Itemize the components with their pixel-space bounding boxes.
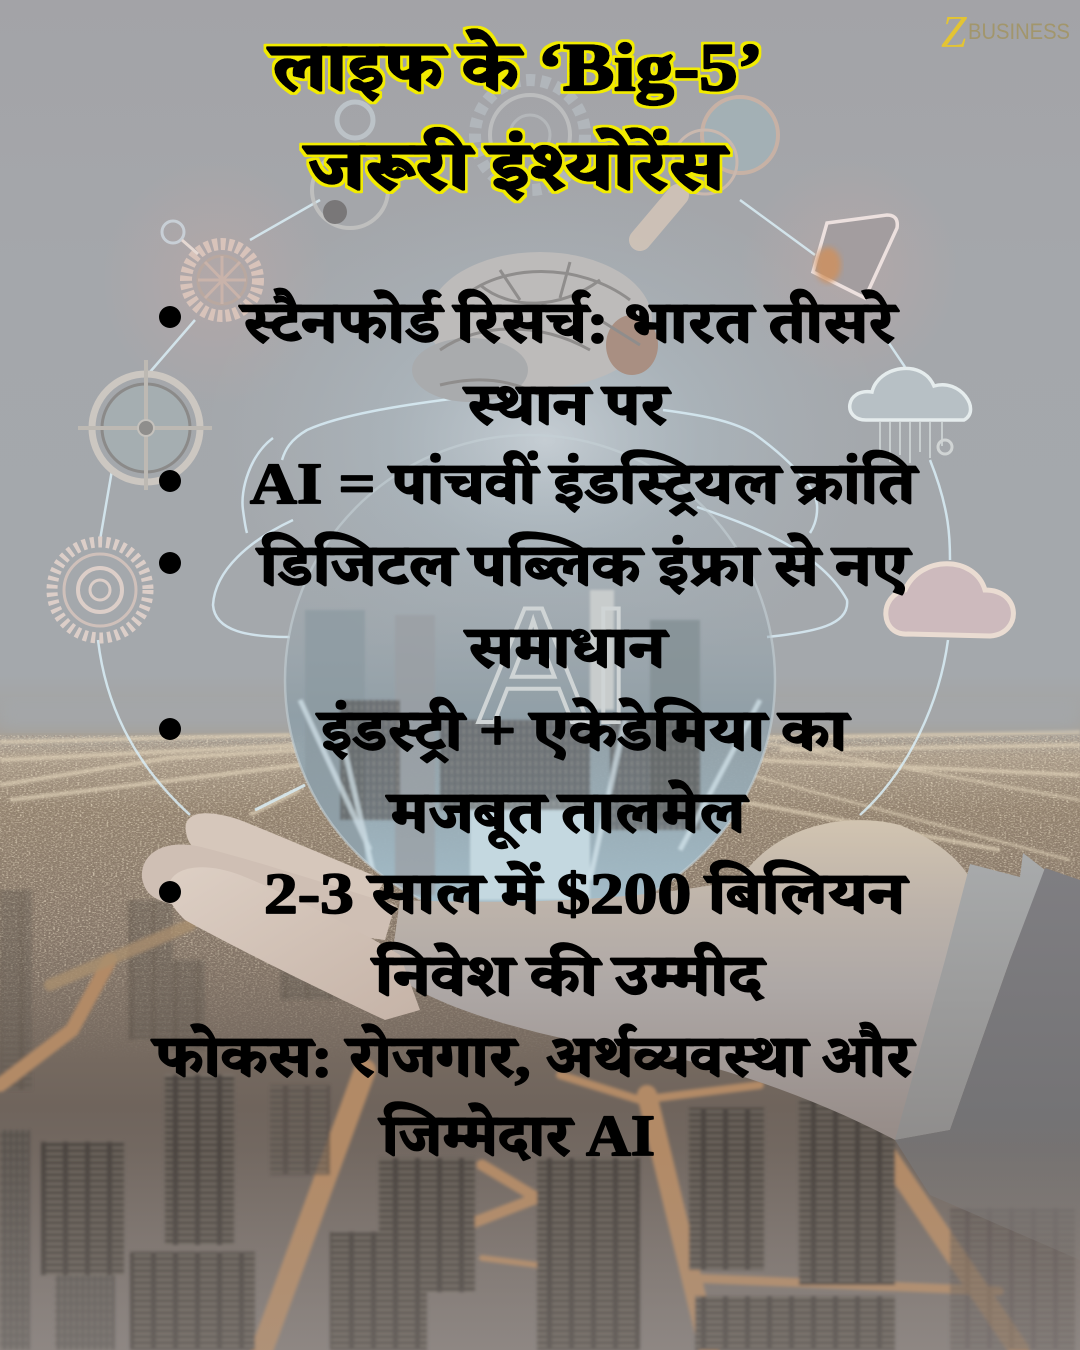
open hand <box>142 813 977 1140</box>
logo: Z Business: Z <box>941 6 967 57</box>
bullet list text: निवेश की उम्मीद <box>370 942 767 1008</box>
bullet list text: AI = पांचवीं इंडस्ट्रियल क्रांति <box>250 450 919 516</box>
focus statement: फोकस: रोजगार, अर्थव्यवस्था और <box>151 1023 916 1089</box>
city lights plain <box>0 728 1080 1047</box>
brain <box>412 252 658 402</box>
focus statement: जिम्मेदार AI <box>378 1103 655 1168</box>
clouds <box>850 368 1013 636</box>
phone icon <box>813 215 897 298</box>
crystal globe <box>286 590 774 902</box>
city towers and roads <box>0 890 1075 1350</box>
bullet list text: मजबूत तालमेल <box>386 780 749 849</box>
title: जरूरी इंश्योरेंस <box>302 127 729 204</box>
suit sleeve <box>895 868 1080 1260</box>
logo: Z Business: BUSINESS <box>968 19 1070 44</box>
bullet list text <box>238 289 919 1008</box>
bullet markers <box>159 306 181 903</box>
shirt cuff <box>895 853 1045 1140</box>
top gears and magnifier <box>312 80 778 240</box>
orange roads <box>0 925 1019 1350</box>
logo: Z Business <box>941 6 1070 57</box>
connector lines <box>98 200 950 815</box>
bullet list text: स्टैनफोर्ड रिसर्च: भारत तीसरे <box>238 289 900 355</box>
bullet list text: इंडस्ट्री + एकेडेमिया का <box>315 698 851 763</box>
focus statement <box>151 1023 916 1168</box>
gears left <box>52 221 258 638</box>
crystal globe: AI <box>478 573 634 757</box>
bullet list text: 2-3 साल में $200 बिलियन <box>264 861 909 926</box>
haze <box>0 1150 1080 1350</box>
bullet list text: समाधान <box>463 615 669 680</box>
title: लाइफ के ‘Big-5’ <box>266 28 763 105</box>
bullet list text: स्थान पर <box>462 372 672 437</box>
title <box>266 28 763 204</box>
bullet list text: डिजिटल पब्लिक इंफ्रा से नए <box>255 532 912 598</box>
